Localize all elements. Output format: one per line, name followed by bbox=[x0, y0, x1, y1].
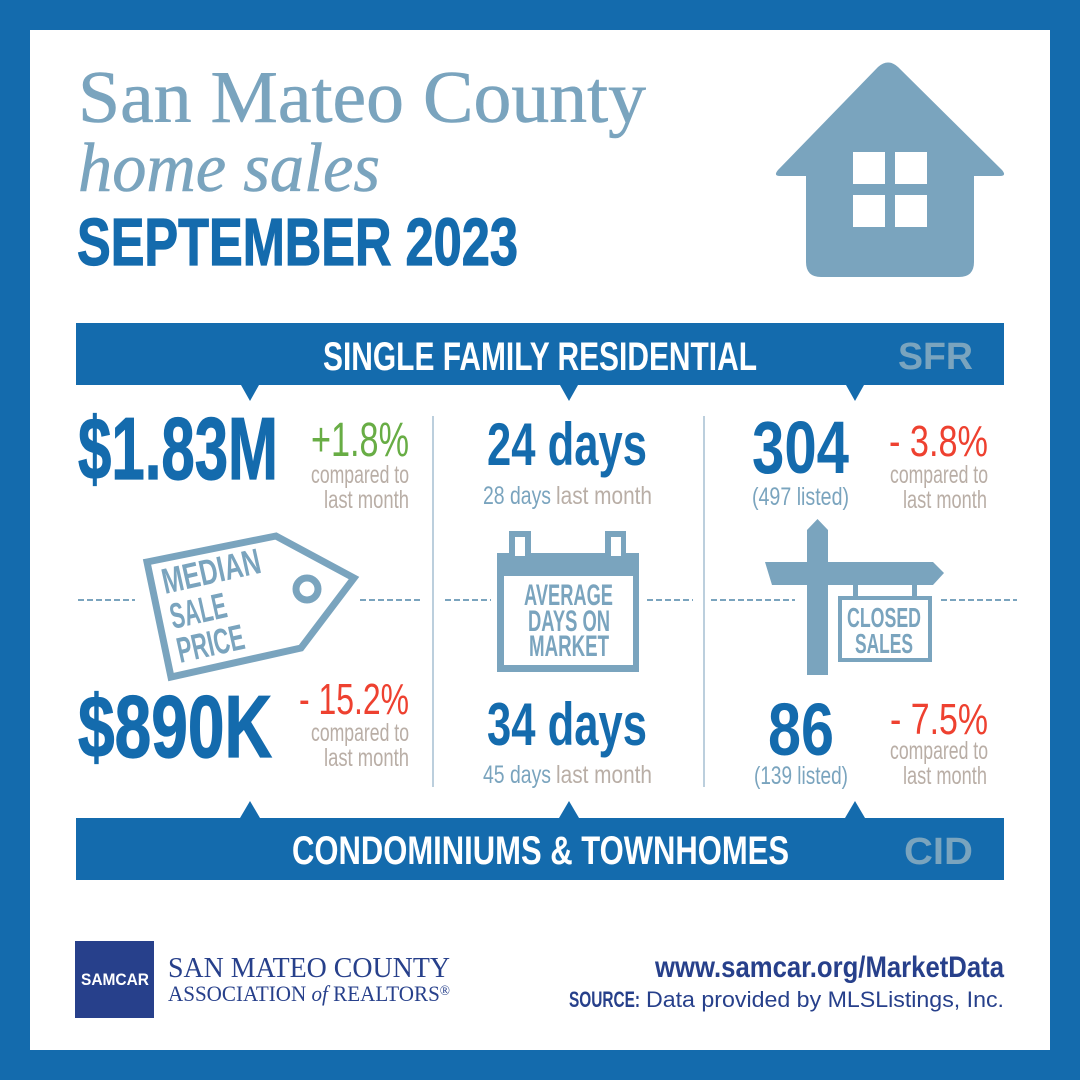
website and source: Data provided by MLSListings, Inc. bbox=[646, 987, 1004, 1012]
icon: closed sales sign post bbox=[765, 519, 944, 675]
icon: calendar: MARKET bbox=[529, 630, 609, 663]
CID closed sales: 86 bbox=[768, 688, 834, 771]
icon: price tag: PRICE bbox=[173, 616, 248, 671]
SFR median sale price: last month bbox=[324, 486, 409, 514]
SFR closed sales: last month bbox=[903, 486, 987, 514]
CID closed sales: compared to bbox=[890, 737, 988, 765]
banner: condominiums and townhomes: CID bbox=[904, 831, 973, 873]
CID median sale price: $890K bbox=[78, 677, 272, 776]
SAMCAR logo bbox=[75, 941, 450, 1018]
SFR days on market bbox=[483, 411, 652, 510]
icon: house bbox=[776, 62, 1004, 277]
dashed separators bbox=[78, 599, 1017, 601]
icon: closed sales sign post: SALES bbox=[855, 628, 913, 659]
CID closed sales: last month bbox=[903, 762, 987, 790]
CID days on market bbox=[483, 691, 652, 789]
SFR median sale price: $1.83M bbox=[78, 399, 278, 498]
SFR closed sales: 304 bbox=[752, 406, 849, 489]
SAMCAR logo: ® bbox=[440, 984, 450, 999]
title bbox=[77, 57, 646, 280]
SFR closed sales bbox=[752, 406, 988, 514]
title: SEPTEMBER 2023 bbox=[77, 205, 518, 280]
CID median sale price: compared to bbox=[311, 719, 409, 747]
SFR closed sales: - 3.8% bbox=[889, 417, 988, 466]
icon: price tag: MEDIAN bbox=[158, 540, 264, 602]
CID median sale price: last month bbox=[324, 744, 409, 772]
column dividers bbox=[432, 416, 705, 787]
CID closed sales: - 7.5% bbox=[890, 695, 988, 744]
SFR closed sales: (497 listed) bbox=[752, 483, 849, 511]
SFR days on market: last month bbox=[556, 482, 652, 510]
SAMCAR logo: ASSOCIATION of REALTORS bbox=[168, 981, 445, 1006]
CID days on market: 45 days bbox=[483, 761, 551, 789]
SAMCAR logo: SAMCAR bbox=[81, 970, 149, 989]
CID closed sales: (139 listed) bbox=[754, 762, 848, 790]
banner: single family residential bbox=[76, 323, 1004, 401]
title: San Mateo County bbox=[78, 57, 646, 139]
SFR days on market: 24 days bbox=[487, 411, 647, 478]
SFR median sale price: +1.8% bbox=[311, 414, 409, 467]
icon: price tag: SALE bbox=[166, 584, 230, 637]
website and source bbox=[569, 951, 1004, 1012]
CID days on market: 34 days bbox=[487, 691, 647, 758]
website and source: SOURCE: bbox=[569, 987, 640, 1012]
icon: closed sales sign post: CLOSED bbox=[847, 602, 921, 633]
icon: calendar bbox=[497, 531, 639, 672]
icon: calendar: AVERAGE bbox=[524, 579, 613, 612]
title: home sales bbox=[78, 130, 380, 207]
website and source: www.samcar.org/MarketData bbox=[654, 951, 1004, 984]
banner: condominiums and townhomes bbox=[76, 801, 1004, 880]
banner: condominiums and townhomes: CONDOMINIUMS & TOWNHOMES bbox=[292, 829, 789, 873]
CID days on market: last month bbox=[556, 761, 652, 789]
CID median sale price: - 15.2% bbox=[299, 675, 409, 724]
SFR days on market: 28 days bbox=[483, 482, 551, 510]
icon: price tag bbox=[147, 536, 354, 677]
banner: single family residential: SINGLE FAMILY RESIDENTIAL bbox=[323, 335, 757, 379]
SAMCAR logo: SAN MATEO COUNTY bbox=[168, 953, 450, 984]
icon: calendar: DAYS ON bbox=[528, 605, 610, 638]
SFR closed sales: compared to bbox=[890, 461, 988, 489]
SFR median sale price: compared to bbox=[311, 461, 409, 489]
CID closed sales bbox=[754, 688, 988, 790]
banner: single family residential: SFR bbox=[898, 336, 973, 378]
